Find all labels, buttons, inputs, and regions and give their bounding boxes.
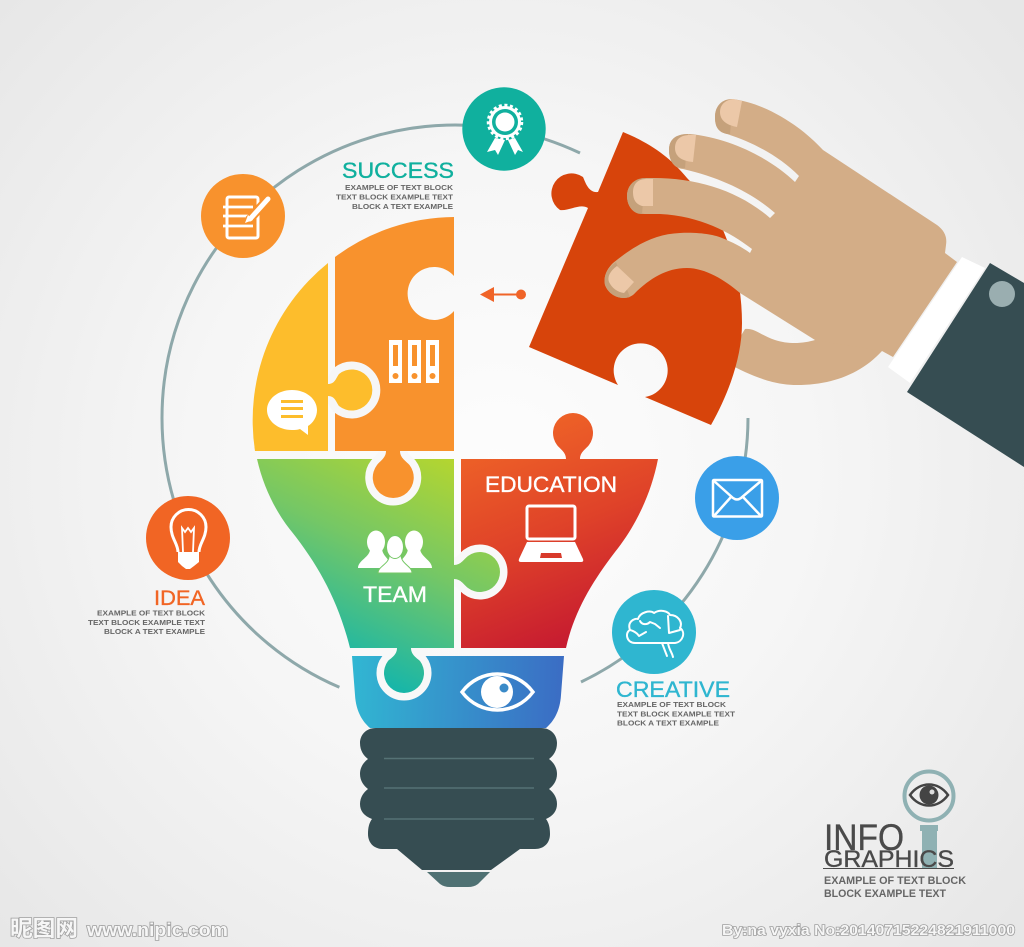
fingernails <box>605 99 742 298</box>
text block: success <box>336 158 454 211</box>
watermark: left: 昵图网 <box>10 916 78 941</box>
icon: people <box>358 530 432 573</box>
text block: success: TEXT BLOCK EXAMPLE TEXT <box>336 192 453 202</box>
icon: speech bubble <box>267 390 317 435</box>
icon: idea bulb <box>146 496 230 580</box>
puzzle piece: team <box>257 459 500 693</box>
logo text: info graphics <box>823 817 966 900</box>
ring connecting the icons <box>162 125 748 687</box>
label: education: EDUCATION <box>485 472 617 497</box>
arrow <box>480 287 526 302</box>
watermark: left <box>10 916 228 941</box>
icon: brain <box>612 590 696 674</box>
logo text: info graphics: BLOCK EXAMPLE TEXT <box>824 888 946 900</box>
text block: creative: BLOCK A TEXT EXAMPLE <box>617 718 719 728</box>
logo: magnifier <box>904 772 954 868</box>
text block: idea: IDEA <box>154 587 205 610</box>
panel: light bulb puzzle <box>253 217 658 887</box>
watermark: left: www.nipic.com <box>86 920 228 940</box>
logo text: info graphics: INFO <box>824 817 904 858</box>
puzzle piece: education <box>461 413 658 648</box>
puzzle piece: base <box>352 656 564 728</box>
text block: success: BLOCK A TEXT EXAMPLE <box>352 202 453 211</box>
text block: success: EXAMPLE OF TEXT BLOCK <box>345 183 454 192</box>
hand: palm behind piece <box>725 329 900 385</box>
puzzle piece: yellow <box>253 263 372 451</box>
icon: envelope <box>695 456 779 540</box>
logo text: info graphics: EXAMPLE OF TEXT BLOCK <box>824 875 966 887</box>
watermark: right: By:na vyxia No:20140715224821911000 <box>722 922 1015 939</box>
text block: idea <box>88 587 206 636</box>
shirt cuff <box>888 257 985 383</box>
icon: notepad <box>201 174 285 258</box>
logo text: info graphics: GRAPHICS <box>824 846 954 873</box>
icon: laptop <box>519 506 583 562</box>
puzzle piece: orange <box>335 217 454 498</box>
jacket sleeve <box>907 263 1024 467</box>
bulb screw base <box>360 728 557 887</box>
label: team: TEAM <box>363 582 427 607</box>
text block: creative <box>616 677 735 728</box>
text block: idea: TEXT BLOCK EXAMPLE TEXT <box>88 618 205 627</box>
icon: success ribbon <box>462 87 546 171</box>
text block: idea: EXAMPLE OF TEXT BLOCK <box>97 608 206 618</box>
icon: eye <box>462 674 533 710</box>
text block: idea: BLOCK A TEXT EXAMPLE <box>104 627 205 636</box>
text block: creative: EXAMPLE OF TEXT BLOCK <box>617 700 727 709</box>
icon: binders <box>389 340 439 383</box>
button <box>989 281 1015 307</box>
text block: creative: CREATIVE <box>616 677 730 702</box>
text block: success: SUCCESS <box>342 158 454 183</box>
puzzle piece: removed <box>529 132 742 425</box>
hand <box>605 99 957 357</box>
text block: creative: TEXT BLOCK EXAMPLE TEXT <box>617 710 735 718</box>
